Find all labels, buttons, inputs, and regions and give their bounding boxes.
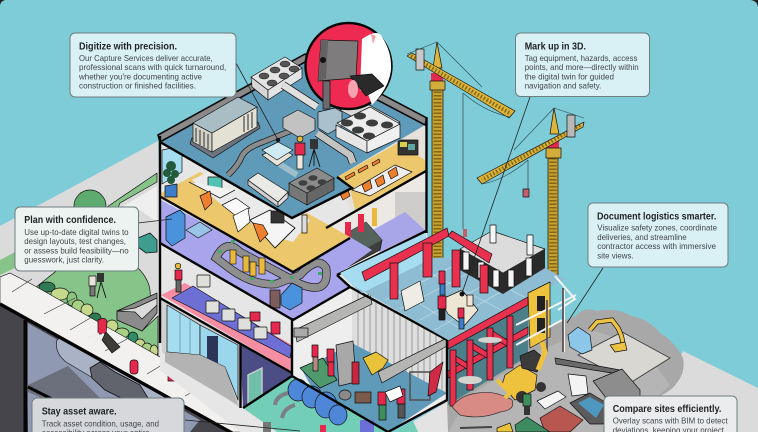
callout: Plan with confidence: guesswork, just clarity.: [24, 255, 104, 265]
long white box: [248, 173, 288, 207]
lobby: [160, 298, 240, 408]
machine room: [326, 172, 426, 275]
roof worker with scanner: [295, 136, 320, 169]
sidewalk: [0, 273, 292, 432]
callout: Compare sites efficiently: Overlay scans with BIM to detect: [613, 416, 728, 426]
ducts: [283, 85, 317, 107]
tree: [74, 190, 106, 222]
callout: Document logistics smarter: deliveries, and streamline: [597, 232, 687, 242]
red steel beams and columns: [362, 228, 492, 299]
callout: Digitize with precision: Our Capture Services deliver accurate,: [79, 53, 213, 63]
six-fan rooftop unit: [251, 57, 302, 100]
callout: Mark up in 3D: [516, 33, 650, 96]
glass deck room: [340, 225, 565, 340]
callout: Plan with confidence: [15, 207, 138, 271]
leader lines: [138, 63, 603, 431]
building structural lines: [160, 118, 447, 432]
callout: Mark up in 3D: Mark up in 3D.: [525, 42, 586, 52]
main yellow office floor: [161, 146, 350, 272]
excavator and concrete slab: [568, 320, 670, 383]
backhoe and soil: [452, 342, 546, 417]
callout: Document logistics smarter: Visualize safety zones, coordinate: [597, 222, 717, 232]
crane 2: [477, 108, 584, 276]
callout: Stay asset aware: Track asset condition, usage, and: [42, 418, 159, 428]
pink production floor: [160, 246, 293, 372]
callout: Plan with confidence: Plan with confidence.: [24, 215, 116, 226]
callout: Mark up in 3D: navigation and safety.: [525, 81, 601, 91]
workers and hydrant on the walk: [87, 273, 176, 381]
site materials: [460, 358, 640, 432]
callout: Plan with confidence: or assess build feasibility—no: [24, 245, 129, 255]
callout: Document logistics smarter: Document logistics smarter.: [597, 212, 717, 222]
lawn with hedges: [35, 268, 158, 362]
callout: Compare sites efficiently: [604, 396, 737, 432]
ground: left grey lot: [0, 141, 165, 372]
teal machine floor: [243, 376, 448, 432]
callout: Plan with confidence: Use up-to-date digital twins to: [24, 227, 129, 237]
right office wall and floor: [337, 125, 426, 215]
callout: Mark up in 3D: points, and more—directly within: [525, 62, 639, 72]
callout: Digitize with precision: whether you're documenting active: [78, 71, 202, 81]
large fan cluster: [336, 100, 400, 153]
callout: Plan with confidence: design layouts, test changes,: [24, 236, 126, 246]
ground: right construction site: [440, 309, 758, 432]
purple production floor: [161, 200, 372, 320]
building: left wall backing: [160, 65, 448, 432]
callout: Mark up in 3D: Tag equipment, hazards, access: [525, 53, 637, 63]
crane 1: [407, 42, 515, 263]
planter: [117, 293, 157, 331]
callout: Mark up in 3D: the digital twin for guided: [525, 71, 614, 81]
inset circle: laser scanner close-up: [306, 23, 392, 109]
callout: Digitize with precision: construction or finished facilities.: [79, 81, 196, 91]
roof deck: [158, 54, 427, 218]
skylight: [262, 138, 293, 166]
callout: Stay asset aware: Stay asset aware.: [42, 406, 117, 418]
small lattice unit: [283, 110, 315, 138]
callout: Digitize with precision: professional scans with quick turnaround,: [79, 62, 226, 72]
dark fan box: [289, 168, 334, 205]
callout: Digitize with precision: [70, 33, 236, 97]
callout: Digitize with precision: Digitize with precision.: [79, 42, 177, 52]
concrete room: [292, 285, 447, 432]
callout: Stay asset aware: [32, 398, 184, 432]
callout: Document logistics smarter: [588, 203, 728, 267]
callout: Document logistics smarter: site views.: [597, 250, 634, 260]
teal car: [138, 233, 157, 253]
blue unit: [318, 108, 342, 134]
callout: Compare sites efficiently: Compare sites efficiently.: [613, 404, 722, 415]
generator: [190, 97, 260, 158]
callout: Document logistics smarter: contractor access with immersive: [597, 241, 716, 251]
steel frame under deck: [448, 276, 576, 406]
dark elevator room: [240, 343, 292, 408]
underground garage: [0, 304, 232, 432]
